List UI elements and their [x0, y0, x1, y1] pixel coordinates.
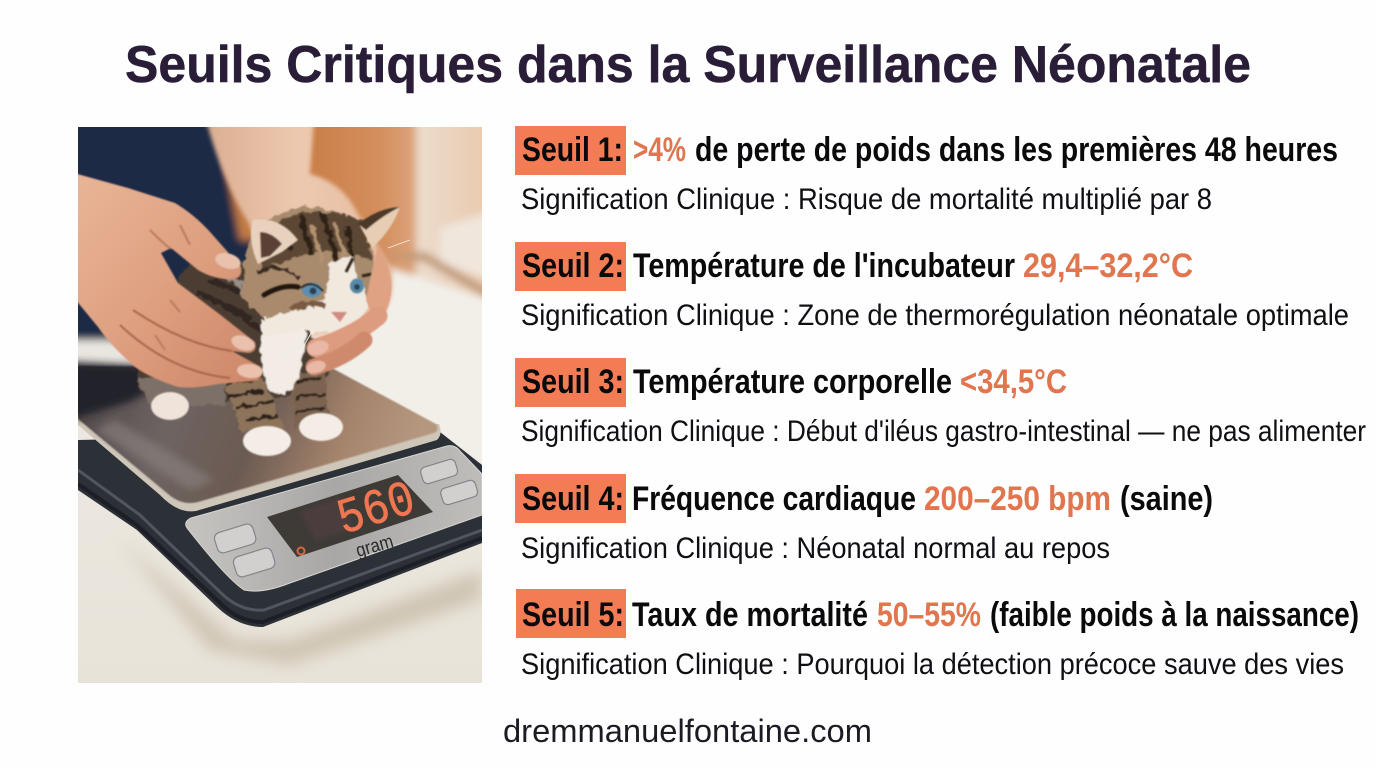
icon: digital scale	[78, 432, 482, 627]
label tag: Seuil 4	[515, 474, 626, 523]
label tag: Seuil 3	[515, 358, 626, 407]
label tag: Seuil 1	[515, 126, 626, 175]
icon: table shadow under the scale	[134, 556, 482, 670]
threshold row 4: Fréquence cardiaque	[632, 480, 916, 518]
threshold row 5	[516, 589, 1359, 681]
kitten paws	[151, 392, 343, 456]
icon: steel weighing pan	[70, 362, 441, 511]
icon: scale buttons	[213, 458, 479, 578]
threshold row 2	[515, 242, 1349, 332]
threshold row 3	[515, 358, 1366, 448]
label tag: Seuil 2	[515, 242, 626, 291]
kitten head	[240, 207, 376, 335]
threshold row 2: 29,4–32,2°C	[1023, 247, 1193, 285]
threshold row 5: 50–55%	[877, 596, 981, 634]
scale unit label: gram	[354, 531, 396, 562]
threshold row 3: Seuil 3:	[522, 363, 624, 401]
threshold row 4: Seuil 4:	[522, 480, 624, 518]
threshold row 5: Seuil 5:	[522, 596, 624, 634]
threshold row 3: Température corporelle	[633, 363, 952, 401]
photo: kitten on a digital scale	[70, 115, 492, 683]
icon: right-hand fingers cradling the chin	[305, 245, 392, 375]
footer website: dremmanuelfontaine.com	[503, 713, 872, 749]
icon: forearm and back of the right hand	[206, 120, 393, 340]
threshold row 4	[515, 474, 1213, 565]
icon: scale display	[267, 475, 433, 557]
threshold row 4: 200–250 bpm	[924, 480, 1111, 518]
kitten eyes	[302, 282, 322, 298]
title: Seuils Critiques dans la Surveillance Néonatale	[125, 36, 1251, 94]
kitten body and legs	[137, 262, 330, 432]
kitten ears	[251, 219, 298, 264]
kitten nose	[331, 312, 347, 322]
icon: kitten	[137, 207, 410, 456]
threshold row 2: Seuil 2:	[522, 247, 624, 285]
threshold row 1	[515, 126, 1338, 216]
threshold row 1: >4%	[633, 131, 686, 169]
threshold row 4: (saine)	[1120, 480, 1213, 518]
scale readout: 560	[331, 472, 422, 549]
kitten eye stripes	[264, 286, 298, 295]
threshold row 5: Taux de mortalité	[632, 596, 868, 634]
threshold row 1: Signification Clinique : Risque de mortalité multiplié par 8	[521, 183, 1212, 216]
icon: left hand holding the kitten	[70, 172, 264, 388]
threshold row 2: Température de l'incubateur	[633, 247, 1015, 285]
label tag: Seuil 5	[516, 589, 626, 638]
threshold row 1: Seuil 1:	[522, 131, 623, 169]
threshold row 4: Signification Clinique : Néonatal normal au repos	[521, 532, 1110, 565]
threshold row 3: <34,5°C	[960, 363, 1067, 401]
